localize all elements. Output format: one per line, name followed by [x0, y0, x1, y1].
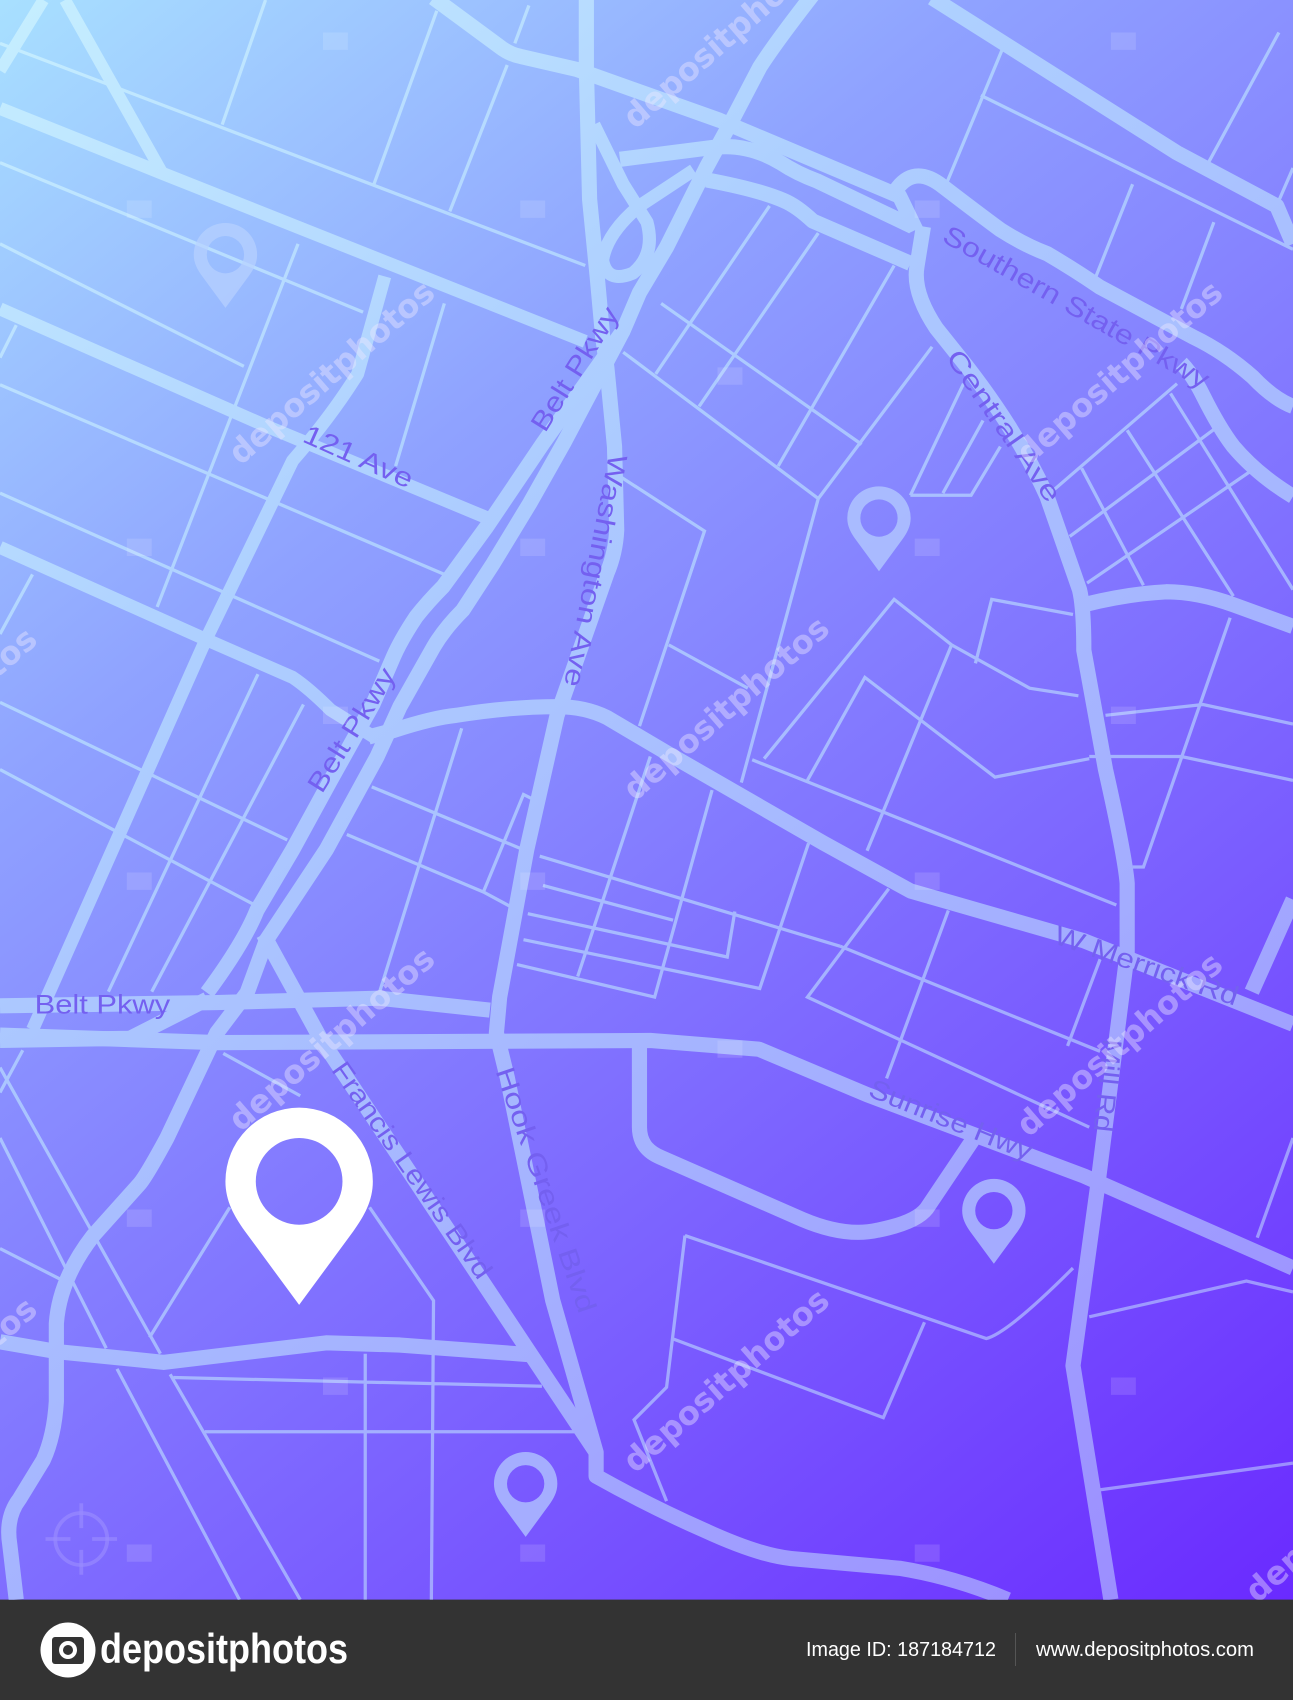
icon: small pin centre right	[847, 486, 911, 571]
footer background	[0, 1600, 1293, 1700]
watermarks: depositphotos	[221, 939, 442, 1139]
label: Southern State Pkwy: Southern State Pkwy	[938, 219, 1216, 395]
icon: large white location pin	[225, 1108, 373, 1305]
label: Mill Rd: Mill Rd	[1088, 1038, 1128, 1134]
footer bar	[0, 1600, 1293, 1700]
icon: small pin lower right	[962, 1179, 1026, 1264]
label: Belt Pkwy lower: Belt Pkwy	[35, 988, 171, 1019]
label: W Merrick Rd: W Merrick Rd	[1050, 919, 1243, 1011]
icon: camera logo	[40, 1622, 96, 1678]
divider	[1015, 1633, 1016, 1666]
watermarks: depositphotos	[615, 609, 837, 808]
label: Sunrise Hwy: Sunrise Hwy	[865, 1073, 1038, 1166]
watermarks: depositphotos	[1009, 945, 1230, 1144]
label: Francis Lewis Blvd: Francis Lewis Blvd	[326, 1055, 499, 1284]
label: Hook Greek Blvd: Hook Greek Blvd	[490, 1063, 603, 1317]
website url: www.depositphotos.com	[1035, 1639, 1254, 1661]
logo wordmark: depositphotos	[100, 1625, 348, 1672]
watermark camera marks	[127, 33, 1136, 1562]
image id: Image ID: 187184712	[806, 1639, 996, 1661]
watermarks: depositphotos	[221, 273, 442, 472]
label: Belt Pkwy middle: Belt Pkwy	[301, 661, 402, 798]
label: Washington Ave: Washington Ave	[558, 452, 634, 690]
icon: crosshair	[46, 1503, 117, 1575]
watermarks: depositphotos	[1009, 273, 1230, 472]
label: Belt Pkwy upper: Belt Pkwy	[524, 300, 625, 437]
icon: small pin bottom	[494, 1452, 557, 1537]
icon: small pin top left	[194, 223, 257, 308]
street labels	[35, 219, 1243, 1317]
label: Central Ave: Central Ave	[940, 343, 1068, 508]
label: 121 Ave: 121 Ave	[299, 418, 418, 494]
watermarks: depositphotos	[615, 1281, 837, 1480]
